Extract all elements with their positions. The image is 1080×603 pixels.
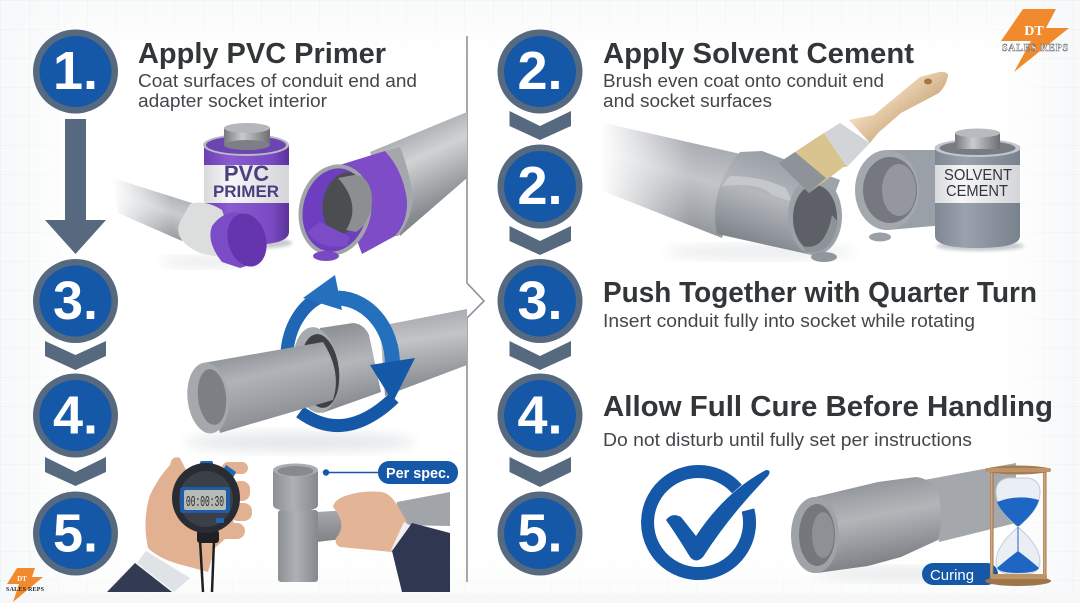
illustration: tee fitting held by hand <box>273 461 458 592</box>
conduit with purple socket <box>290 112 467 262</box>
step badge 4 <box>33 374 118 458</box>
heading: apply PVC primer: Apply PVC Primer <box>138 38 386 70</box>
logo: DT Sales Reps top right: DT <box>1024 24 1044 39</box>
step badge 2: 2. <box>517 41 563 101</box>
left step column <box>33 30 118 576</box>
chevron <box>45 341 106 370</box>
step badge 5: 5. <box>517 504 563 564</box>
callout per spec <box>323 461 458 484</box>
heading: apply solvent cement: Apply Solvent Cement <box>603 38 914 70</box>
step badge 4: 4. <box>53 386 98 446</box>
back conduit <box>380 309 467 396</box>
step badge 2 repeat: 2. <box>517 156 563 216</box>
illustration: curing conduit <box>791 463 1016 580</box>
step badge 3 <box>33 259 118 343</box>
illustration: hand holding stopwatch <box>107 457 252 592</box>
rotation ring front with arrowheads <box>303 275 415 402</box>
step badge 3 <box>498 259 582 343</box>
text: cement description: and socket surfaces <box>603 91 772 111</box>
conduit end <box>815 482 886 573</box>
soft shadow <box>665 246 855 258</box>
primer can <box>203 123 292 249</box>
suit sleeve <box>392 523 450 592</box>
conduit open end <box>184 361 232 435</box>
heading: push together: Push Together with Quarter Turn <box>603 277 1037 309</box>
cement coated socket <box>715 151 842 262</box>
solvent cement can: CEMENT <box>946 183 1008 200</box>
chevron <box>510 341 571 370</box>
hand <box>145 457 252 572</box>
text: primer description: adapter socket interior <box>138 91 327 111</box>
long arrow down <box>45 119 106 254</box>
step badge 5: 5. <box>53 504 98 564</box>
applicator tip <box>178 202 272 271</box>
heading: allow full cure: Allow Full Cure Before Handling <box>603 391 1053 423</box>
right step column <box>498 30 582 576</box>
solvent cement can: SOLVENT <box>944 167 1012 184</box>
step badge 3: 3. <box>53 271 98 331</box>
text: cement description <box>603 71 884 111</box>
stopwatch: 00:00:30 <box>186 494 224 511</box>
conduit <box>608 124 739 238</box>
step badge 2 <box>498 30 582 114</box>
coupling <box>855 150 945 242</box>
front conduit <box>203 342 336 433</box>
cuff <box>391 522 418 557</box>
text: primer description <box>138 71 417 111</box>
socket <box>320 323 381 413</box>
back conduit <box>397 492 450 526</box>
step badge 5 <box>498 492 582 576</box>
logo: DT Sales Reps top right: SALES REPS <box>1002 43 1068 54</box>
logo: DT Sales Reps top right <box>1001 9 1069 72</box>
rotation ring back <box>287 298 394 426</box>
stopwatch <box>172 461 240 592</box>
paint brush <box>778 72 948 193</box>
divider with chevron notch <box>467 36 484 582</box>
chevron <box>45 457 106 486</box>
step badge 4 <box>498 374 582 458</box>
top socket <box>273 471 318 511</box>
step badge 1 <box>33 30 118 114</box>
soft shadow <box>815 568 985 580</box>
vertical tee <box>278 510 318 582</box>
label: curing <box>922 563 998 585</box>
primer can: PRIMER <box>213 182 279 201</box>
step badge 2 repeat <box>498 144 582 228</box>
solvent cement can <box>934 128 1024 251</box>
logo: DT Sales Reps bottom left: DT <box>17 575 27 583</box>
illustration: primer can, applicator and conduit <box>113 112 467 271</box>
step badge 4: 4. <box>517 386 563 446</box>
illustration: solvent cement brush, conduit and can <box>600 72 1024 262</box>
text: primer description: Coat surfaces of conduit end and <box>138 71 417 91</box>
callout per spec: Per spec. <box>386 466 450 482</box>
primer can: PVC <box>224 161 269 186</box>
branch <box>317 510 350 542</box>
step badge 1: 1. <box>53 41 98 101</box>
logo: DT Sales Reps bottom left: SALES REPS <box>6 587 45 593</box>
icon: hourglass <box>985 466 1051 586</box>
hand <box>333 492 407 552</box>
step badge 3: 3. <box>517 271 563 331</box>
icon: check mark in circle <box>648 470 770 574</box>
label: curing: Curing <box>930 567 974 584</box>
back conduit <box>924 463 1016 542</box>
chevron <box>510 226 571 255</box>
socket <box>868 477 941 566</box>
soft shadow <box>185 433 415 451</box>
text: cement description: Brush even coat onto conduit end <box>603 71 884 91</box>
chevron <box>510 111 571 140</box>
suit sleeve and cuff <box>107 551 190 592</box>
illustration: conduit pushed with quarter turn <box>184 275 467 451</box>
chevron <box>510 457 571 487</box>
text: cure description: Do not disturb until fully set per instructions <box>603 430 972 450</box>
applicator rod <box>118 180 238 269</box>
logo: DT Sales Reps bottom left <box>6 568 45 602</box>
text: push description: Insert conduit fully into socket while rotating <box>603 311 975 331</box>
step badge 5 <box>33 492 118 576</box>
